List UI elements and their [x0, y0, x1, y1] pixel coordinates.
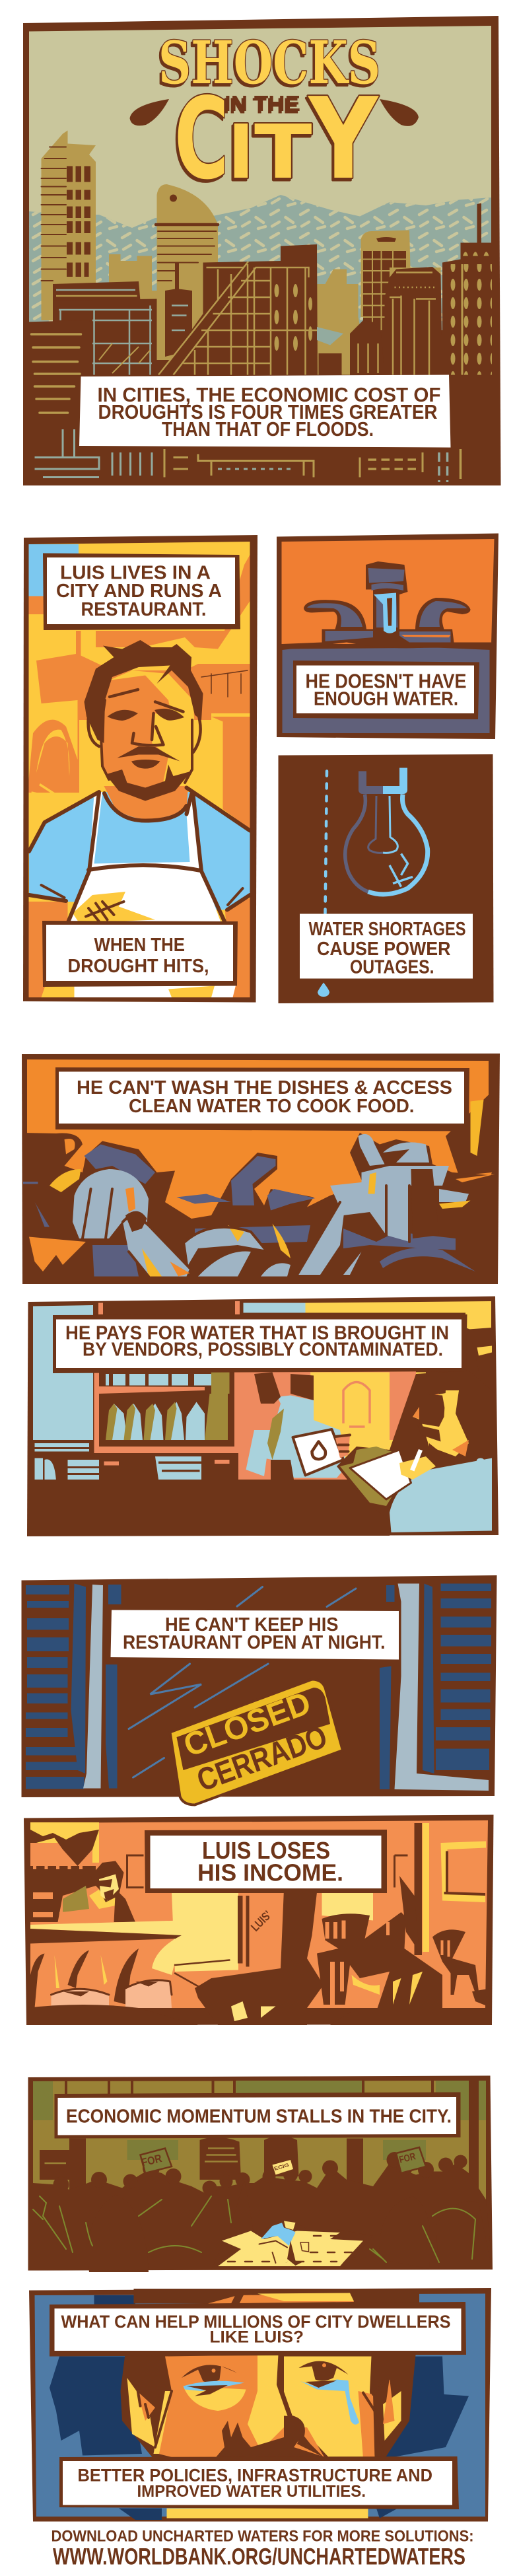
sign: closed cerrado — [170, 1679, 343, 1805]
tan blocks behind — [109, 254, 362, 376]
face shadow — [100, 675, 172, 799]
caption: what can help: LIKE LUIS? — [210, 2328, 304, 2346]
crowd silhouettes — [28, 2152, 493, 2272]
caption: water shortages: CAUSE POWER — [317, 939, 451, 960]
caption: vendors — [53, 1314, 467, 1373]
caption: dishes and clean water: CLEAN WATER TO COOK FOOD. — [129, 1096, 415, 1117]
head — [100, 670, 195, 799]
background wall — [238, 1371, 426, 1480]
caption: Luis lives in a city: RESTAURANT. — [81, 599, 206, 620]
caption: can't keep open at night: RESTAURANT OPEN AT NIGHT. — [123, 1632, 386, 1653]
mountains — [29, 195, 491, 330]
left eye — [182, 2365, 237, 2382]
caption: economic momentum: ECONOMIC MOMENTUM STALLS IN THE CITY. — [66, 2106, 452, 2127]
eyes — [107, 709, 184, 721]
steel dishes — [73, 1134, 469, 1242]
sky — [29, 26, 491, 264]
for rent signs — [140, 2147, 426, 2173]
bottom street windows — [112, 449, 461, 482]
panel: empty restaurant — [24, 1815, 494, 2025]
caption: vendors: BY VENDORS, POSSIBLY CONTAMINATED. — [83, 1340, 443, 1361]
caption: not enough water: ENOUGH WATER. — [314, 688, 458, 709]
caption: loses income: LUIS LOSES — [202, 1837, 330, 1864]
for rent signs: FOR — [398, 2151, 417, 2166]
caption: better policies: BETTER POLICIES, INFRASTRUCTURE AND — [78, 2465, 432, 2485]
caption: when the drought hits: DROUGHT HITS, — [67, 956, 209, 977]
low building roof — [53, 281, 140, 301]
caption: water shortages — [300, 914, 473, 979]
tan curved tower — [156, 184, 218, 360]
caption: loses income: HIS INCOME. — [197, 1859, 343, 1886]
protest sign: ECIG — [273, 2162, 290, 2172]
panel frame — [24, 1815, 494, 2025]
icon: light bulb — [345, 768, 428, 894]
dark background — [279, 754, 494, 1003]
title: shocks in the city: T — [254, 109, 312, 196]
for rent signs: FOR — [140, 2152, 163, 2169]
floor spots — [228, 2236, 357, 2262]
title: shocks in the city — [158, 28, 380, 205]
panel frame — [23, 16, 500, 485]
caption: Luis lives in a city — [43, 554, 240, 630]
panel: closed restaurant — [21, 1575, 497, 1805]
Luis figure — [29, 640, 250, 923]
caption: loses income — [127, 1830, 408, 1893]
caption: dishes and clean water — [55, 1067, 469, 1131]
caption: vendors: HE PAYS FOR WATER THAT IS BROUGHT IN — [65, 1322, 449, 1343]
top hair band — [133, 2289, 419, 2304]
title: shocks in the city: I — [228, 109, 254, 196]
caption: better policies: IMPROVED WATER UTILITIES. — [137, 2482, 366, 2501]
title: shocks in the city: Y — [308, 74, 379, 205]
right tall tower — [442, 203, 492, 485]
beard — [106, 765, 191, 801]
tan tower left — [41, 131, 96, 320]
Luis kneeling — [259, 2219, 309, 2266]
navy hair shadow — [50, 2295, 469, 2520]
panel: faucet with little water — [277, 534, 498, 739]
panel: dirty dishes — [22, 1054, 500, 1284]
right shutter — [380, 1584, 491, 1791]
caption: economic momentum — [54, 2093, 461, 2139]
title: shocks in the city: C — [174, 74, 228, 205]
crowd highlights — [33, 2196, 475, 2262]
apron — [67, 792, 221, 923]
hair — [85, 640, 203, 743]
ground — [23, 375, 492, 485]
callout: economic cost of droughts — [79, 375, 450, 448]
left shutter — [26, 1584, 121, 1789]
title: shocks in the city: SHOCKS — [158, 28, 380, 97]
nose — [132, 713, 164, 745]
door sign: LUIS' — [248, 1908, 274, 1934]
narrow dark tower — [165, 263, 192, 357]
dish outlines — [83, 1186, 409, 1276]
Luis at counter — [59, 1861, 135, 1923]
blue t-shirt — [29, 792, 250, 910]
olive background — [33, 2081, 486, 2266]
orange wall — [281, 539, 494, 644]
yellow doorway — [172, 1892, 373, 1972]
caption: Luis lives in a city: LUIS LIVES IN A — [60, 563, 211, 584]
slate pots — [23, 1144, 475, 1276]
panel: Luis portrait — [23, 535, 258, 1003]
panel: power outage light bulb — [279, 754, 494, 1003]
lit floor — [218, 2231, 363, 2266]
ears — [88, 713, 201, 752]
dish pile silhouette — [22, 1133, 498, 1284]
chin strip — [166, 2509, 368, 2518]
caption: what can help — [50, 2302, 466, 2357]
door sign — [238, 1896, 284, 1972]
tables and chairs — [317, 1876, 492, 2025]
panel frame — [27, 1296, 498, 1536]
caption: dishes and clean water: HE CAN'T WASH THE DISHES & ACCESS — [77, 1077, 452, 1098]
panel frame — [21, 1575, 497, 1797]
icon: right water drop — [380, 99, 419, 126]
pillar and picture frame — [30, 1822, 486, 1952]
diagonal building — [158, 244, 318, 376]
callout: economic cost of droughts: THAN THAT OF FLOODS. — [162, 417, 374, 441]
panel frame — [29, 2288, 491, 2522]
title: shocks in the city: IN THE — [224, 91, 300, 116]
panel frame — [22, 1054, 500, 1284]
dripping water line — [325, 771, 327, 913]
caption: not enough water — [293, 661, 479, 719]
orange wall — [30, 1820, 488, 2008]
glass building — [53, 299, 157, 376]
moustache — [118, 746, 180, 761]
caption: water shortages: WATER SHORTAGES — [309, 919, 466, 940]
foreground left building — [23, 320, 99, 485]
panel: city skyline cover — [23, 16, 500, 485]
callout: economic cost of droughts: IN CITIES, THE ECONOMIC COST OF — [98, 383, 441, 406]
panel: city momentum stalls — [28, 2075, 493, 2272]
icon: faucet — [283, 561, 491, 650]
tan tower right — [360, 230, 441, 330]
callout: economic cost of droughts: DROUGHTS IS FOUR TIMES GREATER — [98, 400, 437, 423]
stools — [26, 1980, 198, 2025]
caption: Luis lives in a city: CITY AND RUNS A — [56, 581, 222, 602]
sign: closed cerrado: CERRADO — [193, 1719, 331, 1799]
panel: crying Luis close-up — [29, 2288, 491, 2569]
panel frame — [28, 2075, 493, 2271]
caption: water shortages: OUTAGES. — [350, 956, 434, 978]
glass reflections — [129, 1587, 356, 1777]
face — [120, 2351, 416, 2458]
caption: not enough water: HE DOESN'T HAVE — [305, 670, 466, 692]
caption: can't keep open at night — [111, 1610, 399, 1659]
bottom ground — [28, 1480, 396, 1536]
orange wall — [27, 1059, 492, 1242]
customer with clipboard — [337, 1328, 495, 1532]
salmon strips — [98, 1301, 240, 1314]
blue background — [34, 2293, 485, 2517]
restaurant background — [29, 542, 250, 997]
caption: when the drought hits: WHEN THE — [94, 935, 185, 956]
water glimpse — [317, 327, 343, 345]
caption: what can help: WHAT CAN HELP MILLIONS OF CITY DWELLERS — [61, 2312, 450, 2332]
plant and foreground table — [175, 1889, 324, 2025]
panel frame — [277, 534, 498, 739]
icon: left water drop — [129, 99, 169, 125]
face outline — [100, 700, 192, 783]
bar counter — [30, 1921, 184, 2008]
protest sign — [272, 2160, 293, 2174]
body outlines — [29, 787, 250, 923]
icon: water drop — [318, 983, 329, 997]
right eye — [298, 2361, 349, 2380]
caption: better policies — [59, 2456, 459, 2509]
truck with water jugs — [34, 1371, 240, 1483]
footer: download line: DOWNLOAD UNCHARTED WATERS FOR MORE SOLUTIONS: — [52, 2527, 474, 2546]
vendor with jug — [246, 1373, 350, 1480]
apron stain — [73, 892, 155, 923]
sink counter — [283, 647, 490, 733]
eyebrows — [110, 690, 184, 712]
mid right buildings — [318, 267, 442, 376]
back shelves with bottles — [30, 1830, 99, 1922]
hair sideburns — [137, 2378, 390, 2456]
neck — [104, 786, 188, 819]
blue sky left — [33, 1303, 305, 1440]
mouth — [131, 760, 160, 769]
dish highlights — [50, 1100, 483, 1276]
sign: closed cerrado: CLOSED — [179, 1685, 316, 1764]
panel frame — [23, 535, 258, 1003]
nose — [279, 2355, 302, 2441]
panel: water vendor — [27, 1296, 498, 1536]
yellow wall top — [305, 1301, 491, 1338]
caption: when the drought hits — [42, 921, 238, 997]
caption: can't keep open at night: HE CAN'T KEEP HIS — [165, 1614, 338, 1635]
tears — [184, 2379, 359, 2425]
